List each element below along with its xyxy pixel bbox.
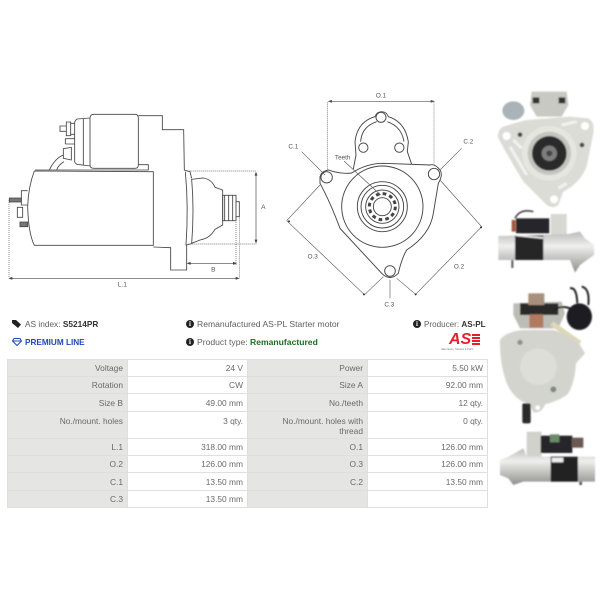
front view labels: O.3 bbox=[308, 253, 318, 260]
specification table: L.1 bbox=[111, 442, 123, 452]
info: AS index: AS index: S5214PR bbox=[25, 319, 98, 329]
front view labels: O.1 bbox=[376, 93, 387, 100]
dimension labels: A bbox=[261, 204, 266, 211]
motor body bbox=[28, 171, 153, 245]
front view labels: C.1 bbox=[288, 144, 299, 151]
dimension labels bbox=[118, 204, 266, 289]
specification table: C.2 bbox=[350, 477, 363, 487]
specification table: Power bbox=[339, 363, 363, 373]
solenoid bbox=[35, 114, 148, 170]
drive nose bbox=[185, 172, 223, 245]
upper housing outline bbox=[353, 112, 412, 169]
info: producer: Producer: AS-PL bbox=[424, 320, 486, 329]
front view labels: O.2 bbox=[454, 264, 465, 271]
specification table: O.1 bbox=[350, 442, 363, 452]
photo: starter side 1 bbox=[498, 211, 594, 273]
specification table: 92.00 mm bbox=[446, 380, 483, 390]
logo: AS-PL bbox=[441, 331, 480, 351]
specification table: 13.50 mm bbox=[446, 477, 483, 487]
info: product type: i bbox=[189, 338, 191, 346]
info: producer: i bbox=[416, 320, 418, 328]
front view labels: C.3 bbox=[384, 301, 395, 308]
logo: AS-PL: AS bbox=[449, 331, 471, 348]
specification table: 126.00 mm bbox=[441, 442, 483, 452]
specification table: 12 qty. bbox=[458, 398, 483, 408]
specification table: O.3 bbox=[350, 459, 363, 469]
specification table: 13.50 mm bbox=[206, 477, 243, 487]
info: product description: Remanufactured AS-PL Starter motor bbox=[197, 319, 340, 329]
specification table: 13.50 mm bbox=[206, 494, 243, 504]
dimension lines bbox=[9, 171, 257, 278]
front view labels: C.2 bbox=[463, 139, 474, 146]
front view labels: Teeth bbox=[335, 154, 351, 161]
specification table: Rotation bbox=[92, 380, 123, 390]
dimension O.1 bbox=[328, 100, 434, 170]
concentric rings and pinion bbox=[342, 166, 423, 247]
specification table: No./teeth bbox=[329, 398, 363, 408]
specification table: CW bbox=[229, 380, 243, 390]
logo: AS-PL: Alternators, Starters & Parts bbox=[441, 348, 473, 351]
specification table: 318.00 mm bbox=[201, 442, 243, 452]
photo: starter rear bbox=[500, 287, 592, 423]
info: product type: Product type: Remanufactured bbox=[197, 337, 318, 347]
front view labels bbox=[288, 93, 474, 308]
specification table: O.2 bbox=[110, 459, 123, 469]
callout lines bbox=[287, 148, 482, 298]
specification table: 0 qty. bbox=[463, 416, 483, 426]
specification table: 3 qty. bbox=[223, 416, 243, 426]
specification table: Size B bbox=[99, 398, 123, 408]
photo: starter side 2 bbox=[500, 432, 595, 485]
mounting flange bbox=[320, 163, 441, 277]
specification table: Voltage bbox=[95, 363, 123, 373]
info: product description: i bbox=[189, 320, 191, 328]
dimension labels: B bbox=[211, 266, 216, 273]
specification table: 126.00 mm bbox=[201, 459, 243, 469]
specification table: 5.50 kW bbox=[452, 363, 483, 373]
specification table: C.3 bbox=[110, 494, 123, 504]
specification table: Size A bbox=[339, 380, 363, 390]
solenoid terminals bbox=[49, 122, 75, 170]
specification table: No./mount. holes with thread bbox=[282, 416, 363, 436]
info: premium line: PREMIUM LINE bbox=[25, 338, 85, 347]
specification table: C.1 bbox=[110, 477, 123, 487]
drive housing bbox=[138, 116, 192, 270]
mounting holes bbox=[321, 172, 332, 183]
specification table: 126.00 mm bbox=[441, 459, 483, 469]
pinion bbox=[223, 195, 239, 221]
dimension ends bbox=[288, 220, 482, 295]
photo: starter front bbox=[498, 92, 594, 207]
specification table: No./mount. holes bbox=[60, 416, 123, 426]
specification table bbox=[7, 359, 488, 508]
specification table: 24 V bbox=[226, 363, 243, 373]
rear terminals bbox=[17, 191, 28, 217]
dimension labels: L.1 bbox=[118, 282, 127, 289]
specification table: 49.00 mm bbox=[206, 398, 243, 408]
